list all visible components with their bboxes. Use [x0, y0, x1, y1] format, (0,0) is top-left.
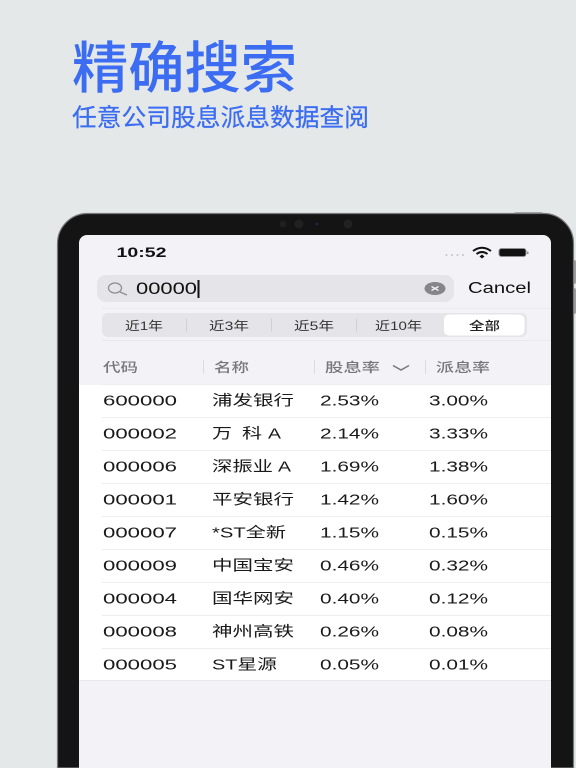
row 000002: 万	[212, 426, 232, 442]
row 600000	[103, 392, 488, 410]
row 000001: 1.42%	[320, 492, 379, 508]
row 000009: 000009	[103, 558, 177, 574]
table header: 代码	[103, 360, 138, 375]
row 000006: 1.38%	[429, 460, 488, 476]
row 000004: 000004	[103, 592, 177, 608]
icon: magnifier	[108, 283, 127, 295]
search query: 00000	[136, 280, 197, 298]
search field	[97, 275, 454, 302]
status bar icons	[446, 248, 528, 258]
row 000005: 0.05%	[320, 658, 379, 674]
row 000007: 1.15%	[320, 526, 379, 542]
row 000002	[103, 426, 488, 442]
segmented control: 近1年	[125, 319, 163, 333]
row 000008: 0.08%	[429, 624, 488, 640]
table header	[103, 360, 490, 375]
table header: 股息率	[325, 360, 380, 375]
row 000008: 神州高铁	[212, 624, 294, 640]
row 000001: 000001	[103, 492, 177, 508]
table rows	[79, 384, 551, 681]
row 000009	[103, 558, 488, 574]
row 000007	[103, 524, 488, 542]
row 600000: 3.00%	[429, 394, 488, 410]
row 000001: 1.60%	[429, 492, 488, 508]
row 000005	[103, 656, 488, 674]
segmented control	[102, 313, 527, 337]
row 000005: ST星源	[212, 656, 278, 674]
segmented control: 近10年	[375, 319, 422, 333]
row 000005: 000005	[103, 658, 177, 674]
table header: 名称	[214, 360, 249, 375]
row 000006: 1.69%	[320, 460, 379, 476]
status bar time: 10:52	[116, 245, 166, 260]
row 000008	[103, 624, 488, 640]
selected segment	[444, 314, 524, 336]
row 000002: 科	[242, 426, 262, 442]
row 000008: 0.26%	[320, 624, 379, 640]
row 000006: 深振业	[212, 458, 273, 476]
table header: 派息率	[436, 360, 490, 375]
row 000006: 000006	[103, 460, 177, 476]
row 000009: 0.46%	[320, 558, 379, 574]
row 600000: 600000	[103, 394, 177, 410]
screen	[79, 235, 551, 768]
row 000007: 000007	[103, 526, 177, 542]
row 000002: 2.14%	[320, 426, 379, 442]
row 000002: A	[268, 426, 281, 442]
row 600000: 浦发银行	[212, 392, 294, 410]
title: 精确搜索	[72, 37, 297, 100]
row 000002: 3.33%	[429, 426, 488, 442]
row 000008: 000008	[103, 624, 177, 640]
icon: clear button	[424, 282, 446, 295]
segmented control: 全部	[469, 318, 500, 333]
row 000004	[103, 590, 488, 608]
row 000006	[103, 458, 488, 476]
subtitle: 任意公司股息派息数据查阅	[72, 104, 369, 132]
device frame	[58, 212, 576, 768]
row 000007: 0.15%	[429, 526, 488, 542]
row 000004: 0.40%	[320, 592, 379, 608]
row 000007: *ST全新	[212, 524, 286, 542]
icon: sort chevron	[393, 366, 409, 370]
row 000002: 000002	[103, 426, 177, 442]
row 600000: 2.53%	[320, 394, 379, 410]
cancel button: Cancel	[468, 280, 531, 297]
row 000001	[103, 492, 488, 508]
segmented control: 近5年	[294, 319, 334, 333]
segmented control: 近3年	[209, 319, 249, 333]
row 000009: 0.32%	[429, 558, 488, 574]
row 000004: 0.12%	[429, 592, 488, 608]
row 000001: 平安银行	[212, 492, 294, 508]
row 000006: A	[278, 460, 291, 476]
row 000009: 中国宝安	[212, 558, 294, 574]
row 000005: 0.01%	[429, 658, 488, 674]
row 000004: 国华网安	[212, 590, 294, 608]
